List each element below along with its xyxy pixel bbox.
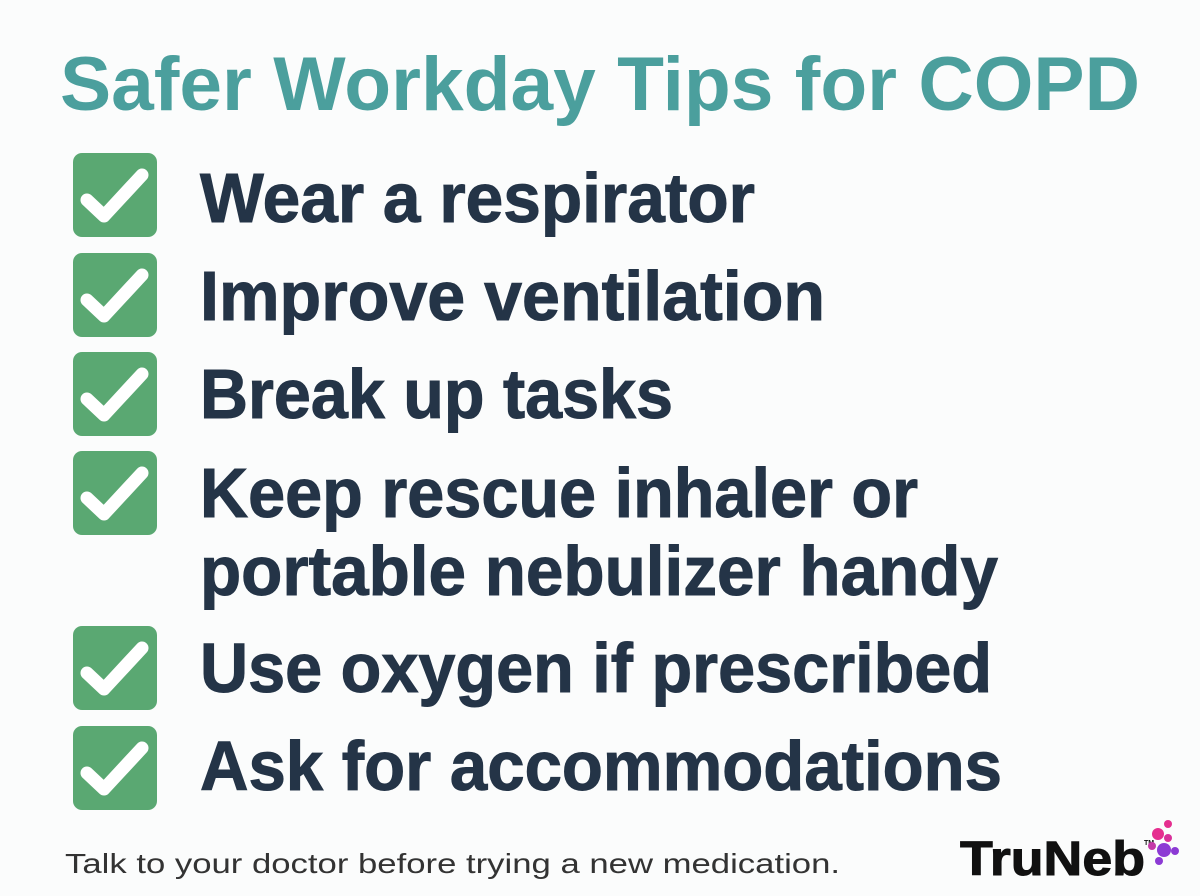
item: improve ventilation: Improve ventilation xyxy=(200,257,825,335)
item: break up tasks: Break up tasks xyxy=(200,355,673,433)
footer disclaimer: Talk to your doctor before trying a new medication. xyxy=(65,848,840,879)
item: keep rescue inhaler: portable nebulizer handy xyxy=(200,532,998,610)
title: Safer Workday Tips for COPD xyxy=(60,42,1140,127)
logo: TruNeb xyxy=(960,820,1179,886)
item: keep rescue inhaler xyxy=(73,451,998,610)
checklist xyxy=(73,153,1002,810)
logo: TruNeb: TM xyxy=(1144,840,1154,847)
item: use oxygen: Use oxygen if prescribed xyxy=(200,629,992,707)
item: ask for accommodations: Ask for accommodations xyxy=(200,727,1002,805)
logo: TruNeb: TruNeb xyxy=(960,833,1145,886)
item: wear a respirator: Wear a respirator xyxy=(200,159,755,237)
item: keep rescue inhaler: Keep rescue inhaler or xyxy=(200,454,918,532)
